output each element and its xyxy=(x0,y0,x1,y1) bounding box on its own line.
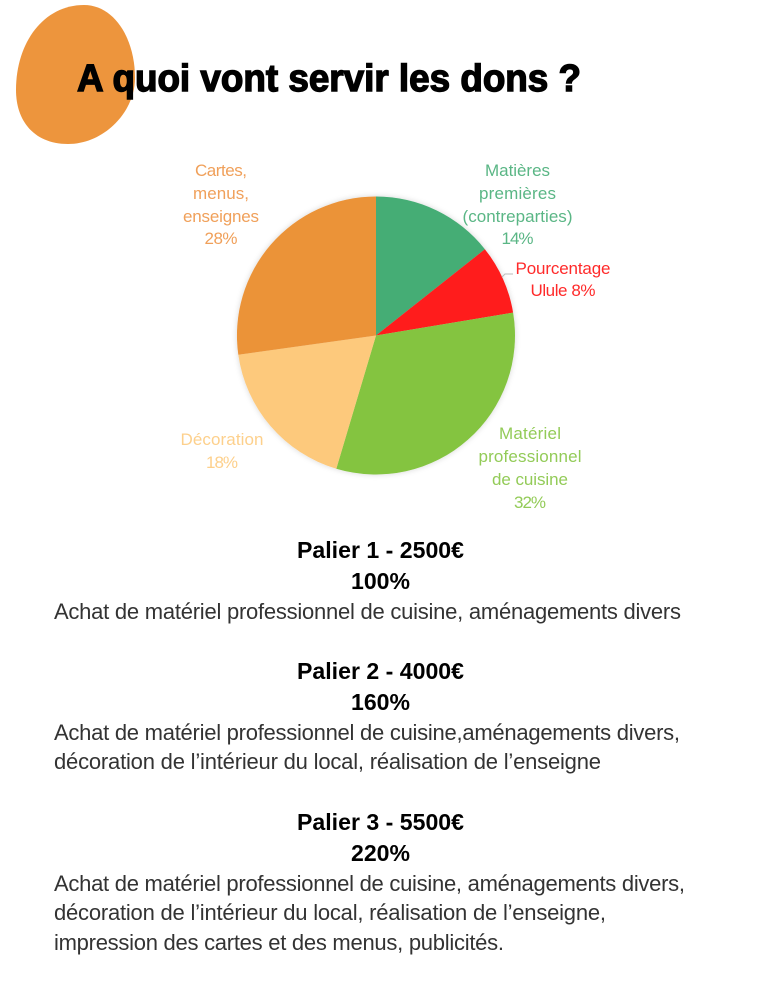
label: pourcentage Ulule: Ulule 8% xyxy=(530,281,596,300)
palier 1 percentage: 100% xyxy=(351,568,410,594)
label: matières premières: Matières xyxy=(485,161,550,180)
label: matériel professionnel de cuisine: Matériel xyxy=(499,424,561,443)
label: décoration: 18% xyxy=(206,453,238,472)
slice: décoration 18% xyxy=(238,336,376,469)
palier 3 description xyxy=(54,871,685,955)
palier 3 description: décoration de l’intérieur du local, réalisation de l’enseigne, xyxy=(54,900,606,925)
label: matériel professionnel de cuisine: de cuisine xyxy=(492,470,568,489)
palier 2 heading: Palier 2 - 4000€ xyxy=(297,658,464,684)
palier 3 description: Achat de matériel professionnel de cuisine, aménagements divers, xyxy=(54,871,685,896)
pie chart xyxy=(180,161,610,512)
palier 1 heading: Palier 1 - 2500€ xyxy=(297,537,464,563)
slice: matières premières 14% xyxy=(376,196,485,336)
palier 1 xyxy=(54,537,681,624)
palier 3 description: impression des cartes et des menus, publicités. xyxy=(54,930,504,955)
title: A quoi vont servir les dons ? xyxy=(77,58,581,100)
label: cartes, menus, enseignes xyxy=(183,161,259,248)
palier 3 heading: Palier 3 - 5500€ xyxy=(297,809,464,835)
label: matériel professionnel de cuisine: 32% xyxy=(514,493,546,512)
label: cartes, menus, enseignes: Cartes, xyxy=(195,161,247,180)
slice: pourcentage Ulule 8% xyxy=(376,249,513,336)
decorative orange blob xyxy=(16,5,135,144)
palier 3 percentage: 220% xyxy=(351,840,410,866)
label: matières premières: premières xyxy=(479,184,556,203)
label: matières premières xyxy=(462,161,572,248)
label: décoration xyxy=(180,430,264,472)
pie slices xyxy=(237,196,515,474)
label: pourcentage Ulule: Pourcentage xyxy=(516,259,610,278)
label: matières premières: (contreparties) xyxy=(462,207,572,226)
palier 2 xyxy=(54,658,680,774)
leader line xyxy=(502,274,513,277)
palier 2 percentage: 160% xyxy=(351,689,410,715)
slice: cartes, menus, enseignes 28% xyxy=(237,196,376,355)
label: matières premières: 14% xyxy=(502,229,534,248)
label: décoration: Décoration xyxy=(180,430,264,449)
label: cartes, menus, enseignes: 28% xyxy=(204,229,238,248)
palier 1 description: Achat de matériel professionnel de cuisine, aménagements divers xyxy=(54,599,681,624)
label: cartes, menus, enseignes: enseignes xyxy=(183,207,259,226)
slice: matériel professionnel 32% xyxy=(336,313,515,474)
palier 2 description: décoration de l’intérieur du local, réalisation de l’enseigne xyxy=(54,749,601,774)
label: cartes, menus, enseignes: menus, xyxy=(193,184,249,203)
palier 3 xyxy=(54,809,685,955)
label: matériel professionnel de cuisine: professionnel xyxy=(478,447,582,466)
label: pourcentage Ulule xyxy=(516,259,610,300)
palier 2 description xyxy=(54,720,680,774)
palier 2 description: Achat de matériel professionnel de cuisine,aménagements divers, xyxy=(54,720,680,745)
label: matériel professionnel de cuisine xyxy=(478,424,582,512)
